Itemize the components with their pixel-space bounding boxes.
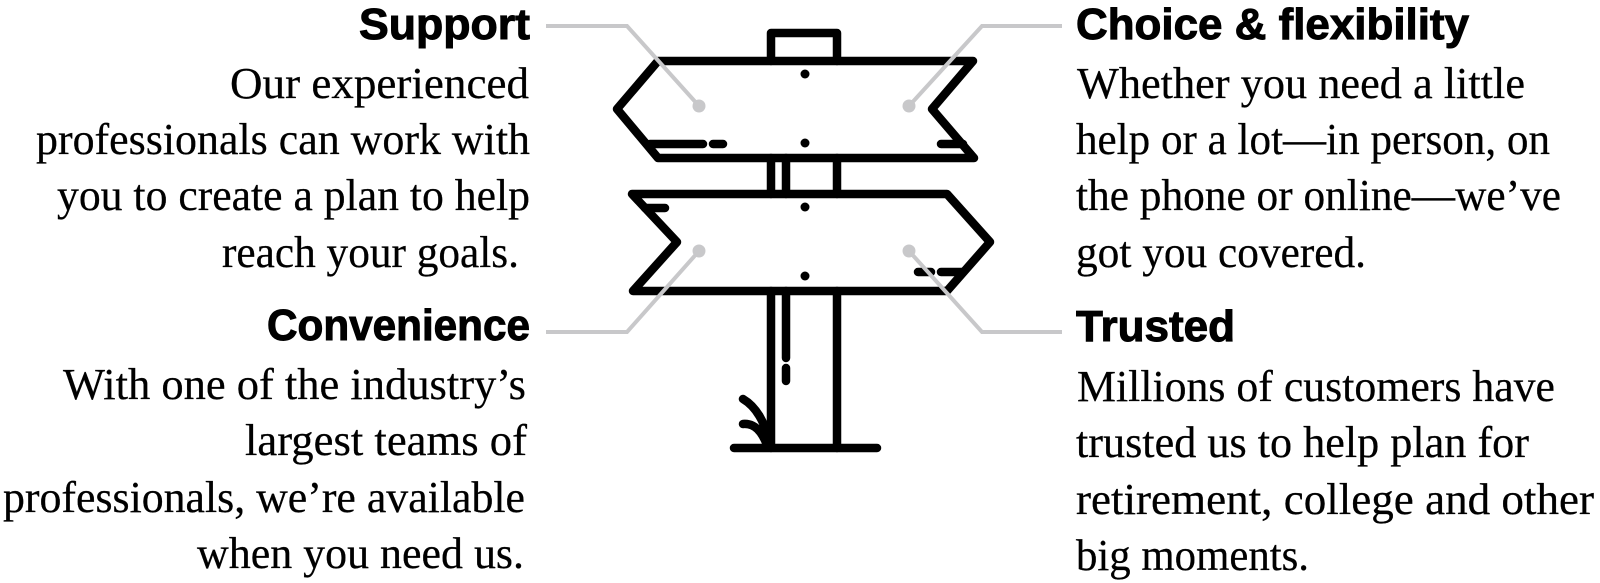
post cap [771, 33, 837, 61]
body: convenience: largest teams of [245, 416, 527, 465]
body: choice and flexibility: help or a lot—in person, on [1076, 115, 1550, 164]
upper sign board [617, 61, 974, 158]
connector: convenience [546, 244, 706, 332]
upper sign details [650, 140, 963, 148]
body: support: you to create a plan to help [57, 171, 530, 220]
lower sign details [645, 208, 962, 272]
heading: trusted: Trusted [1076, 302, 1235, 351]
text block: convenience [3, 301, 530, 578]
post lower section [771, 291, 837, 448]
connector: trusted [902, 244, 1062, 332]
text block: choice and flexibility [1076, 0, 1561, 277]
nail dots [800, 70, 810, 280]
post highlight dashes [782, 291, 790, 381]
body: choice and flexibility: Whether you need a little [1077, 59, 1525, 108]
heading: choice and flexibility: Choice & flexibility [1076, 0, 1470, 49]
body: convenience [3, 360, 527, 578]
body: convenience: With one of the industry’s [63, 360, 526, 409]
body: trusted [1076, 362, 1594, 580]
body: choice and flexibility: got you covered. [1076, 228, 1366, 277]
body: convenience: when you need us. [197, 529, 524, 578]
grass [743, 399, 769, 445]
body: trusted: big moments. [1076, 531, 1309, 580]
body: support: professionals can work with [36, 115, 530, 164]
body: convenience: professionals, we’re available [3, 473, 525, 522]
body: support: Our experienced [230, 59, 529, 108]
connector: choice and flexibility [902, 26, 1062, 112]
body: choice and flexibility [1076, 59, 1561, 277]
lower sign board [632, 194, 990, 291]
body: trusted: trusted us to help plan for [1076, 418, 1529, 467]
body: trusted: retirement, college and other [1076, 475, 1594, 524]
body: support: reach your goals. [222, 228, 519, 277]
connector: support [546, 26, 706, 112]
heading: convenience: Convenience [267, 301, 530, 350]
body: trusted: Millions of customers have [1077, 362, 1555, 411]
post middle section [771, 158, 837, 194]
text block: support [36, 0, 530, 277]
body: support [36, 59, 530, 277]
body: choice and flexibility: the phone or online—we’ve [1076, 171, 1561, 220]
ground line [734, 444, 877, 452]
text block: trusted [1076, 302, 1594, 580]
icon: signpost [617, 33, 990, 448]
heading: support: Support [359, 0, 530, 49]
